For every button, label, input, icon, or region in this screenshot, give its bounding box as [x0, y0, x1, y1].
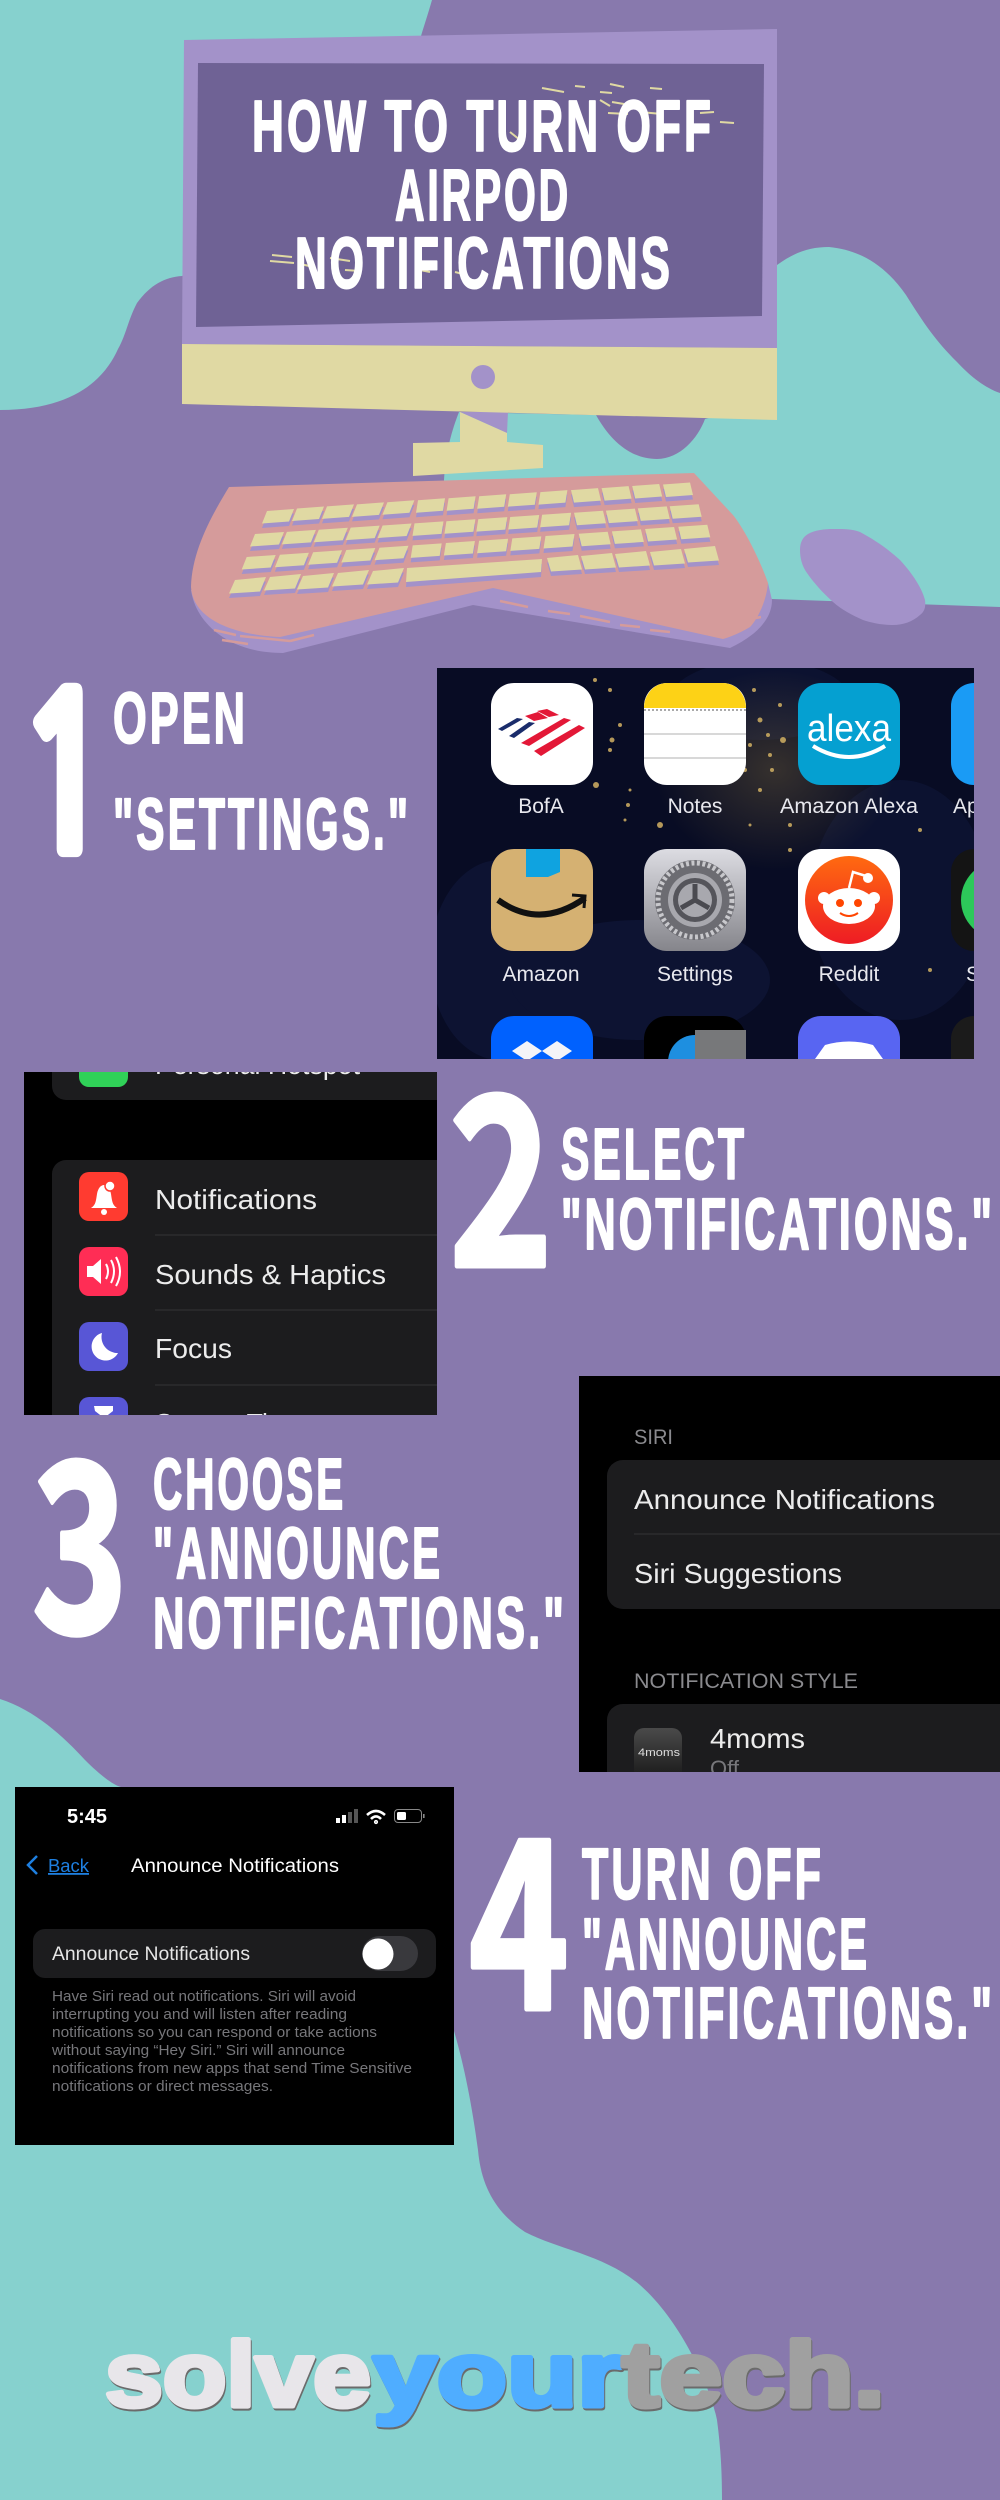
panel: Siri options: Announce Notifications: [634, 1484, 935, 1515]
keyboard: [191, 473, 772, 653]
panel: 4moms row: 4moms: [638, 1747, 681, 1759]
panel: toggle row: Announce Notifications: [52, 1944, 250, 1965]
step 1 heading: [113, 679, 411, 865]
step 1 heading: "SETTINGS.": [113, 785, 411, 865]
logo: solveyourtech: tech.: [622, 2324, 885, 2426]
panel: 4moms row: 4moms: [710, 1723, 805, 1754]
icon: sounds speaker: [79, 1247, 128, 1296]
app icon: Amazon Alexa: alexa: [807, 708, 892, 750]
app icon: Discord: [798, 1016, 900, 1059]
title line 1: HOW TO TURN OFF: [252, 87, 714, 167]
logo: solveyourtech: your: [373, 2324, 622, 2426]
logo: solveyourtech: solve: [105, 2324, 371, 2426]
description paragraph: interrupting you and will listen after reading: [52, 2006, 347, 2023]
status bar time: 5:45: [67, 1806, 107, 1828]
description paragraph: notifications so you can respond or take actions: [52, 2024, 377, 2041]
label: NOTIFICATION STYLE: NOTIFICATION STYLE: [634, 1670, 858, 1693]
background: teal blob top left: [0, 0, 432, 410]
icon: focus moon: [79, 1322, 128, 1371]
description paragraph: Have Siri read out notifications. Siri will avoid: [52, 1988, 356, 2005]
icon: battery: [394, 1810, 425, 1822]
row: Sounds & Haptics: Sounds & Haptics: [155, 1259, 386, 1290]
app icon: Notes: [644, 683, 746, 785]
monitor stand: [413, 412, 543, 476]
illustration: desktop computer: [182, 29, 925, 653]
mouse: [800, 529, 925, 625]
panel: Siri options: Siri Suggestions: [634, 1558, 842, 1589]
app icon: dark S app: [644, 1016, 746, 1059]
app label: Amazon: Amazon: [502, 963, 580, 986]
app icon: Reddit: [798, 849, 900, 951]
background: teal blob right: [444, 247, 1000, 607]
description paragraph: notifications from new apps that send Time Sensitive: [52, 2060, 412, 2077]
panel: Siri options: [607, 1460, 1000, 1609]
app label: partial: S: [966, 963, 980, 986]
icon: screen time: [79, 1397, 128, 1415]
row: Notifications: Notifications: [155, 1184, 317, 1215]
monitor frame: [182, 29, 777, 348]
icon: signal bars: [336, 1809, 358, 1823]
keyboard shadow: [191, 575, 772, 653]
panel: 4moms row: [607, 1704, 1000, 1772]
app icon: Amazon: [491, 849, 593, 951]
app label: Reddit: Reddit: [819, 963, 880, 986]
step 4: [15, 1739, 995, 2145]
keys: [229, 482, 719, 598]
logo: solveyourtech: [105, 2324, 885, 2426]
step 1 heading: OPEN: [113, 679, 248, 759]
step 4 number: 4: [469, 1739, 569, 2077]
background: teal blob bottom: [0, 1699, 722, 2500]
step 2 heading: SELECT: [561, 1115, 747, 1195]
step 2 number: 2: [449, 996, 553, 1334]
step 3 screenshot: notification settings: [579, 1376, 1000, 1772]
panel: 4moms row: Off: [710, 1756, 740, 1781]
back link: Back: [48, 1856, 90, 1876]
app label: App partial: App: [953, 795, 990, 818]
step 3 number: 3: [32, 1362, 128, 1700]
step 2 screenshot: settings list: Personal Hotspot: [155, 1049, 360, 1080]
monitor camera dot: [471, 365, 495, 389]
step 3 heading: [153, 1445, 567, 1664]
step 4 heading: [582, 1835, 995, 2054]
description paragraph: [51, 1988, 412, 2095]
step 2 heading: [561, 1115, 995, 1265]
step 2: [24, 996, 995, 1460]
panel: toggle row: [33, 1929, 436, 1978]
app icon: Settings: [644, 849, 746, 951]
step 4 heading: TURN OFF: [582, 1835, 824, 1915]
app label: BofA: BofA: [518, 795, 564, 818]
app icon: Dropbox: [491, 1016, 593, 1059]
app icon: Amazon Alexa: [798, 683, 900, 785]
app icon: partial green: [951, 849, 974, 951]
app icon: partial dark: [951, 1016, 974, 1059]
step 1 screenshot: home screen: [437, 668, 974, 1059]
row: Screen Time: Screen Time: [155, 1408, 305, 1439]
step 3 heading: CHOOSE: [153, 1445, 346, 1525]
description paragraph: without saying “Hey Siri.” Siri will announce: [51, 2042, 345, 2059]
icon: back chevron: [28, 1856, 37, 1874]
step 1: [32, 668, 974, 1059]
keyboard body: [191, 473, 768, 639]
step 3 heading: NOTIFICATIONS.": [153, 1584, 567, 1664]
title scuff marks: [270, 84, 734, 274]
step 3 heading: "ANNOUNCE: [153, 1514, 443, 1594]
description paragraph: notifications or direct messages.: [52, 2078, 273, 2095]
step 1 number: 1: [16, 671, 116, 884]
row: Focus: Focus: [155, 1333, 232, 1364]
icon: notifications bell: [79, 1172, 128, 1221]
app icon: App Store partial: [951, 683, 974, 785]
app label: Notes: Notes: [668, 795, 722, 818]
title: [252, 87, 714, 304]
title line 3: NOTIFICATIONS: [295, 224, 673, 304]
monitor screen: [196, 63, 764, 327]
label: SIRI: SIRI: [634, 1426, 673, 1449]
step 4 screenshot: announce notifications toggle: [15, 1787, 454, 2145]
title line 2: AIRPOD: [395, 156, 571, 236]
app label: Amazon Alexa: Amazon Alexa: [780, 795, 918, 818]
app icon: BofA: [491, 683, 593, 785]
nav title: Announce Notifications: [131, 1856, 339, 1877]
icon: wifi: [367, 1811, 385, 1823]
app label: Settings: Settings: [657, 963, 733, 986]
monitor chin: [182, 344, 777, 420]
step 3: [34, 1376, 1000, 1772]
step 2 screenshot: settings list: [24, 1072, 437, 1415]
